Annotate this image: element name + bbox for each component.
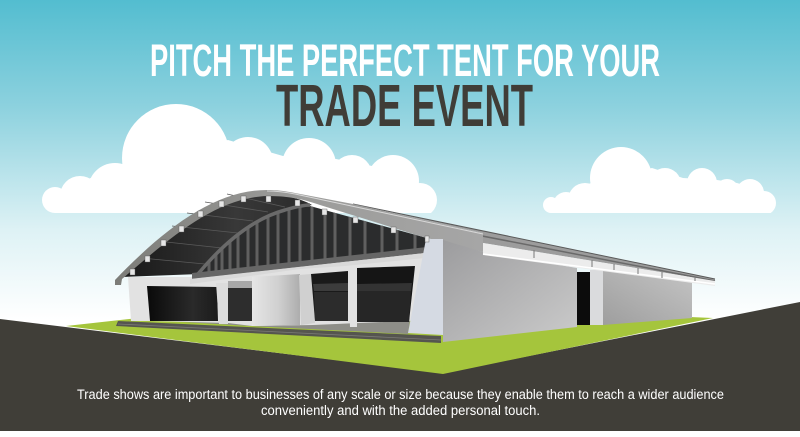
fascia band bbox=[483, 243, 715, 286]
intro text: Trade shows are important to businesses of any scale or size because they enable them to reach a wider audience bbox=[77, 387, 724, 402]
fascia highlight bbox=[483, 254, 715, 284]
beam bbox=[192, 247, 427, 279]
inner arch bbox=[198, 205, 310, 274]
corner wedge bbox=[408, 239, 443, 335]
door bbox=[577, 272, 590, 325]
cloud: right bbox=[543, 147, 776, 218]
far side wall bbox=[603, 270, 692, 325]
arch highlight bbox=[267, 191, 483, 234]
roof underside bbox=[122, 195, 312, 277]
opening: right bbox=[357, 266, 415, 322]
sky background bbox=[0, 0, 800, 320]
tent building bbox=[115, 190, 715, 343]
column: left bbox=[216, 283, 228, 324]
roof lights bbox=[130, 196, 429, 275]
cloud: left bbox=[42, 104, 437, 217]
opening: left bbox=[147, 286, 218, 321]
title: line two: TRADE EVENT bbox=[276, 73, 533, 139]
intro text bbox=[77, 387, 724, 418]
column: right bbox=[348, 269, 357, 327]
back wall panels bbox=[200, 206, 427, 273]
front wall bbox=[128, 250, 430, 326]
roof arch edge and soffit band bbox=[115, 190, 483, 285]
light front beam bbox=[190, 253, 425, 284]
side pillar bbox=[590, 270, 603, 325]
side wall bbox=[443, 240, 577, 342]
ground: dark foreground bbox=[0, 302, 800, 431]
roof slope plane bbox=[353, 204, 715, 281]
truss posts bbox=[208, 206, 416, 272]
centre block bevel bbox=[299, 274, 315, 325]
intro text: conveniently and with the added personal touch. bbox=[261, 403, 540, 418]
tent floor bbox=[116, 320, 441, 343]
opening: centre right bbox=[311, 271, 348, 321]
roof rib lines bbox=[141, 194, 285, 264]
opening: middle left bbox=[228, 281, 252, 321]
fascia brackets bbox=[534, 250, 695, 281]
centre block bbox=[252, 274, 300, 326]
ground: green lawn bbox=[66, 300, 713, 374]
